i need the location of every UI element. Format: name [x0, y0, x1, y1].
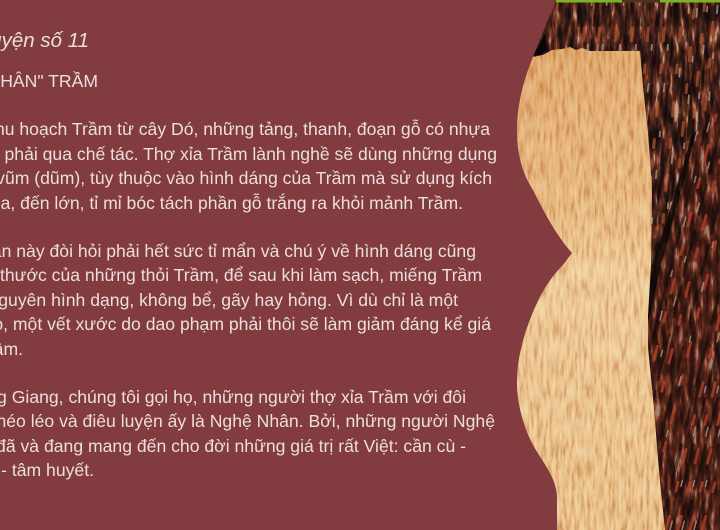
heading: HÂN" TRẦM	[0, 71, 98, 91]
text block: paragraph 3: đã và đang mang đến cho đời những giá trị rất Việt: cần cù -	[0, 436, 466, 456]
text block: paragraph 3: héo léo và điêu luyện ấy là Nghệ Nhân. Bởi, những người Nghệ	[0, 411, 495, 431]
green strip	[556, 0, 720, 2]
text block: paragraph 1: hu hoạch Trầm từ cây Dó, những tảng, thanh, đoạn gỗ có nhựa	[0, 119, 490, 139]
text block: paragraph 1: a, đến lớn, tỉ mỉ bóc tách phần gỗ trắng ra khỏi mảnh Trầm.	[1, 193, 463, 213]
text block: paragraph 3: g Giang, chúng tôi gọi họ, những người thợ xỉa Trầm với đôi	[0, 387, 466, 407]
dark notch at plank top	[533, 34, 547, 56]
shadow along seam	[648, 130, 697, 322]
text block: paragraph 1: phải qua chế tác. Thợ xỉa Trầm lành nghề sẽ dùng những dụng	[4, 144, 497, 164]
panel: wood photo	[517, 0, 720, 530]
text block: paragraph 1	[0, 119, 497, 213]
dark agarwood	[510, 0, 720, 530]
text block: paragraph 2	[0, 241, 492, 359]
light sapwood plank	[510, 40, 670, 530]
text block: paragraph 3	[0, 387, 495, 480]
text block: paragraph 2: ạn này đòi hỏi phải hết sức tỉ mẩn và chú ý về hình dáng cũng	[0, 241, 476, 261]
dark agarwood upper streaks	[556, 0, 718, 265]
text block: paragraph 3: - tâm huyết.	[1, 460, 94, 480]
text block: paragraph 2: guyên hình dạng, không bể, gãy hay hỏng. Vì dù chỉ là một	[0, 290, 458, 310]
text block: paragraph 2: o, một vết xước do dao phạm phải thôi sẽ làm giảm đáng kể giá	[0, 314, 491, 334]
dark agarwood right strand	[648, 106, 720, 530]
wood texture group	[510, 0, 720, 530]
text block: paragraph 1: vũm (dũm), tùy thuộc vào hình dáng của Trầm mà sử dụng kích	[0, 168, 492, 188]
text block: paragraph 2: thước của những thỏi Trầm, để sau khi làm sạch, miếng Trầm	[0, 265, 482, 285]
